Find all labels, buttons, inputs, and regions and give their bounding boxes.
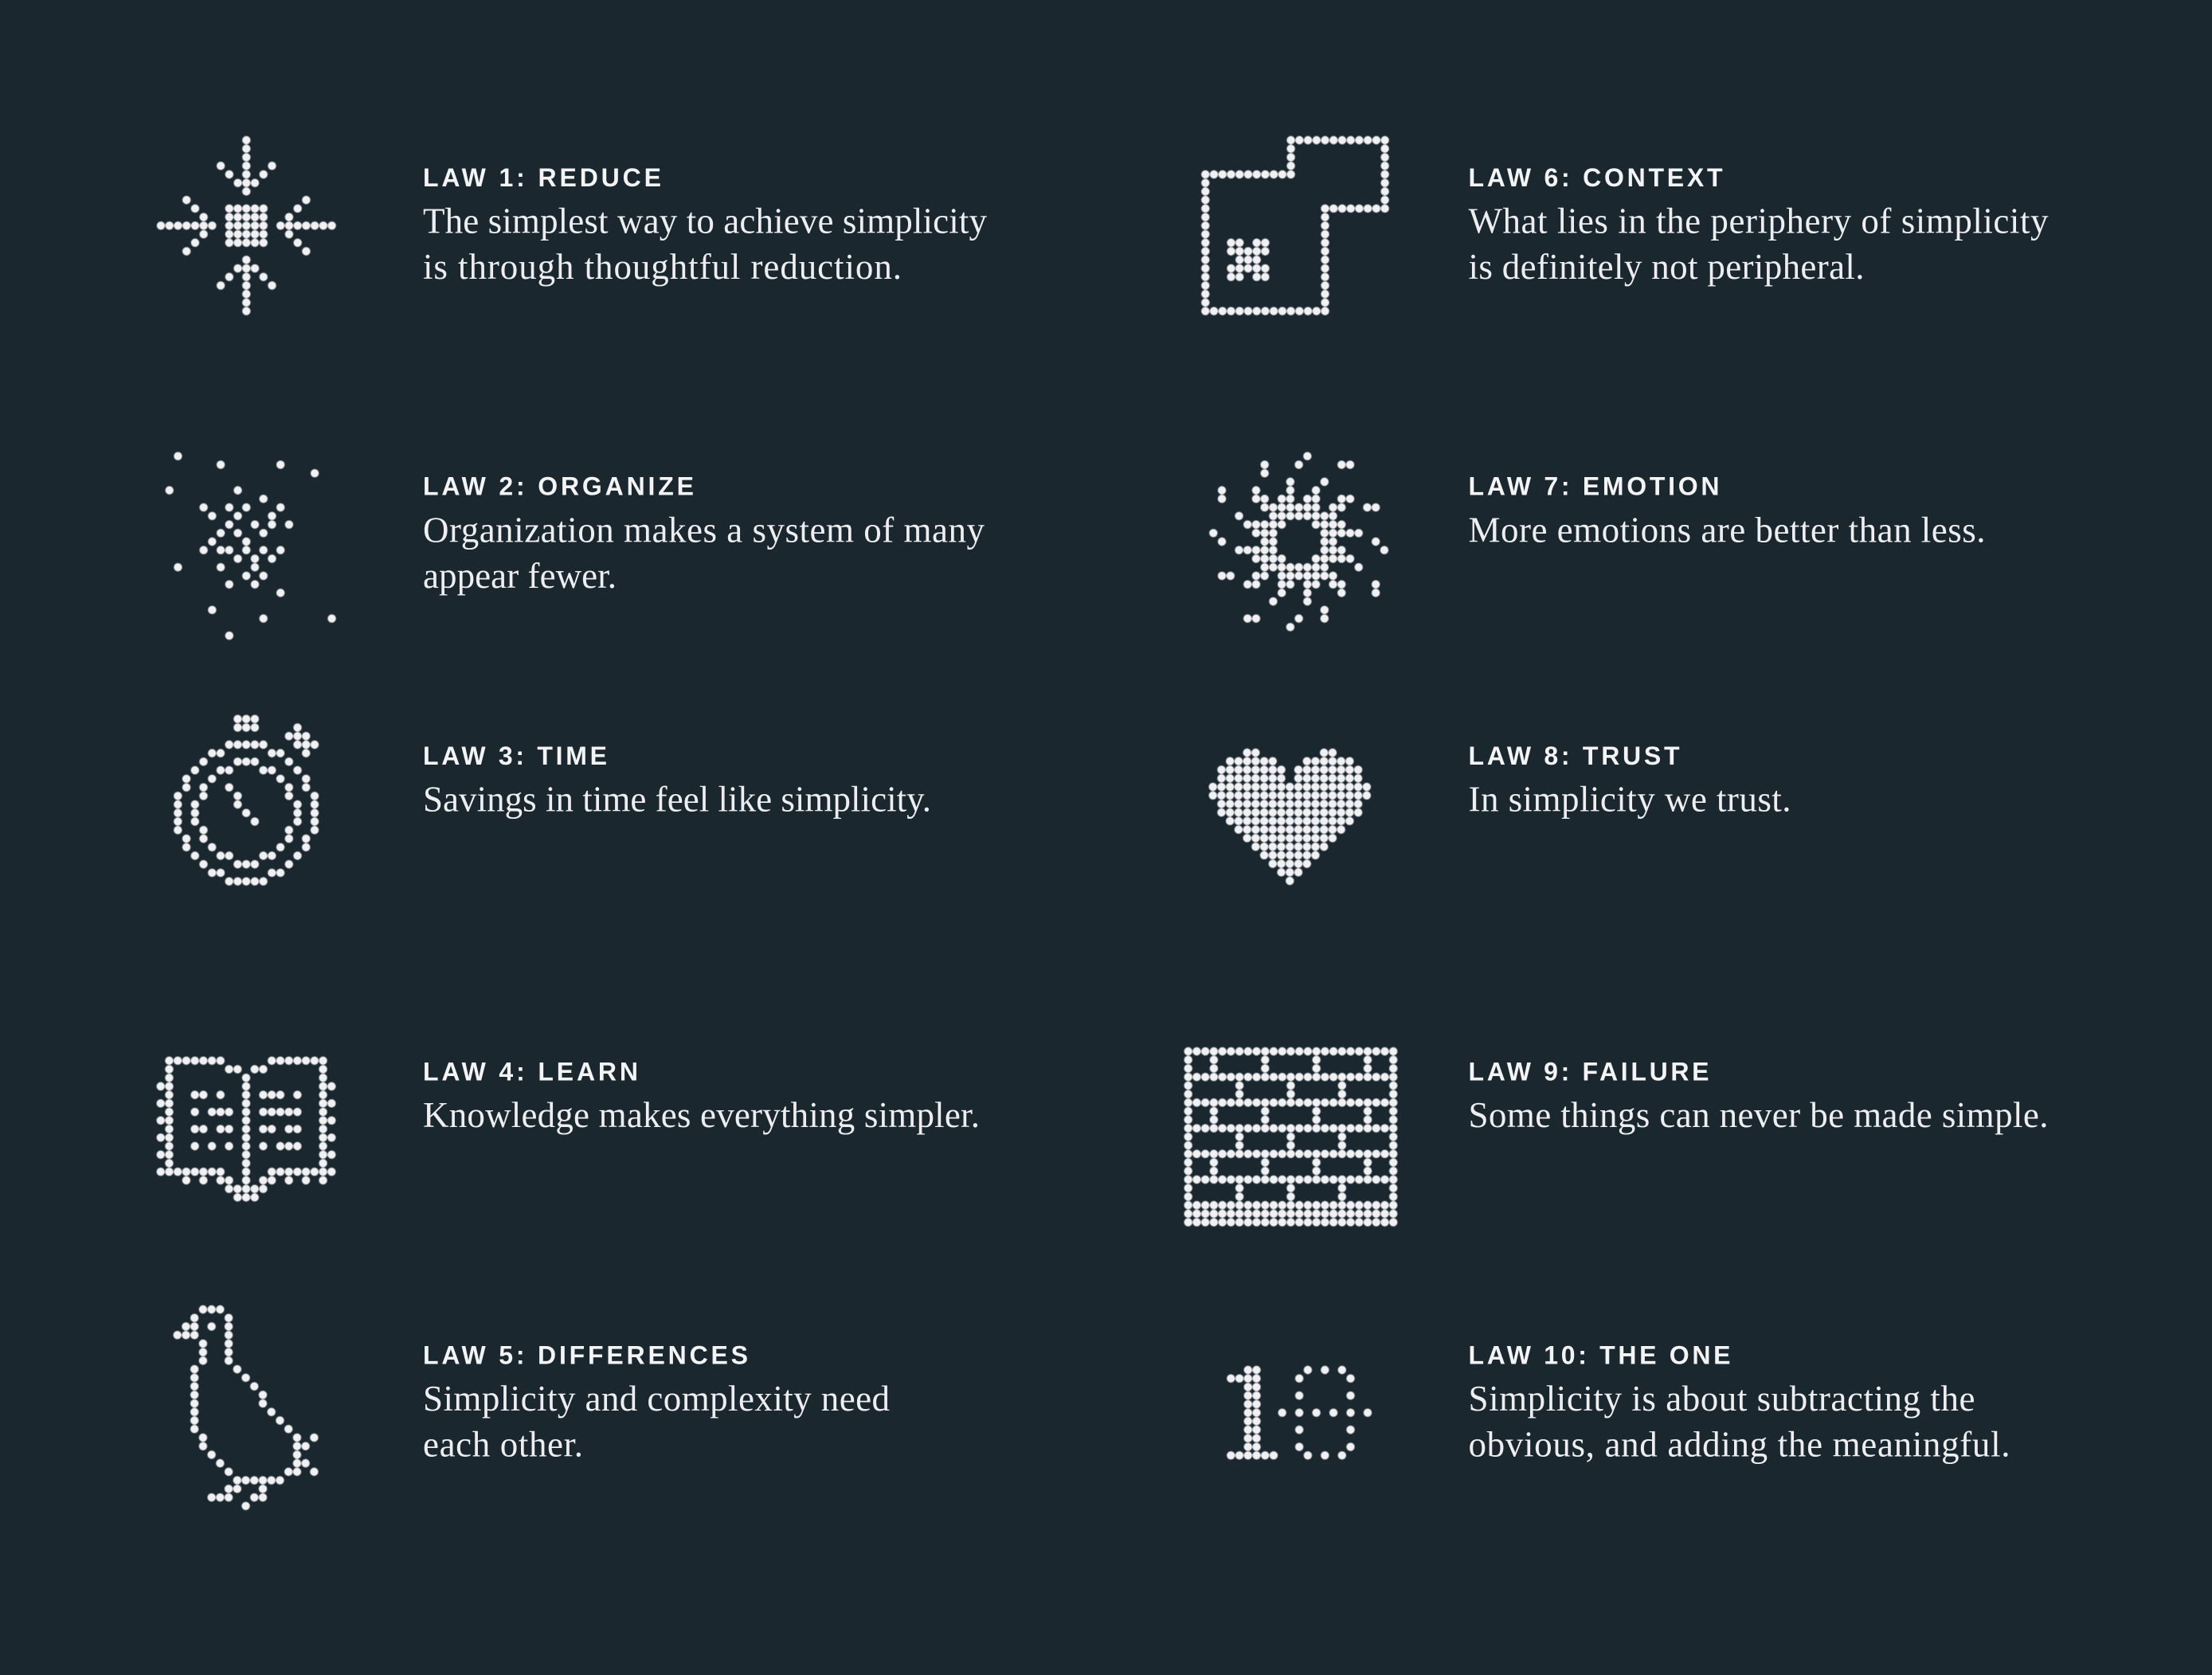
text: law 1 description: The simplest way to achieve simplicity (423, 202, 988, 241)
icon: brick wall (1188, 1051, 1393, 1223)
text: law 10 description: Simplicity is about subtracting the (1469, 1379, 1975, 1419)
heading: law 6: LAW 6: CONTEXT (1469, 163, 1723, 192)
icon: goose (178, 1309, 314, 1506)
panel: law 5 differences (178, 1309, 890, 1506)
text: law 2 description: appear fewer. (423, 556, 617, 596)
text: law 3 description: Savings in time feel like simplicity. (423, 779, 931, 819)
text: law 1 description: is through thoughtful reduction. (423, 247, 902, 287)
icon: open book (161, 1061, 331, 1197)
icon: heart (1213, 753, 1367, 881)
icon: stopwatch (178, 719, 315, 882)
panel: law 3 time (178, 719, 931, 882)
icon: arrows pointing into a square (161, 140, 332, 311)
panel: law 8 trust (1213, 742, 1791, 881)
panel: law 9 failure (1188, 1051, 2049, 1223)
text: law 10 description: obvious, and adding the meaningful. (1469, 1424, 2010, 1464)
panel: law 7 emotion (1213, 456, 1985, 627)
heading: law 2: LAW 2: ORGANIZE (423, 472, 694, 500)
text: law 6 description: What lies in the periphery of simplicity (1469, 202, 2049, 241)
heading: law 5: LAW 5: DIFFERENCES (423, 1341, 748, 1370)
panel: law 4 learn (161, 1058, 980, 1197)
panel: law 2 organize (170, 456, 985, 636)
text: law 6 description: is definitely not peripheral. (1469, 247, 1864, 287)
panel: law 1 reduce (161, 140, 988, 311)
text: law 4 description: Knowledge makes everything simpler. (423, 1095, 980, 1135)
text: law 8 description: In simplicity we trust. (1469, 779, 1791, 819)
icon: outlined shape with a cross (1205, 140, 1385, 311)
text: law 6 description (1469, 202, 2049, 287)
heading: law 10: LAW 10: THE ONE (1469, 1341, 1730, 1370)
heading: law 3: LAW 3: TIME (423, 742, 607, 770)
panel: law 10 the one (1231, 1341, 2010, 1464)
heading: law 4: LAW 4: LEARN (423, 1058, 638, 1086)
text: law 5 description (423, 1379, 890, 1464)
heading: law 9: LAW 9: FAILURE (1469, 1058, 1709, 1086)
text: law 7 description: More emotions are better than less. (1469, 510, 1985, 550)
icon: radiating burst (1213, 456, 1384, 627)
icon: number ten (1231, 1370, 1368, 1455)
heading: law 1: LAW 1: REDUCE (423, 163, 661, 192)
text: law 9 description: Some things can never be made simple. (1469, 1095, 2049, 1135)
text: law 1 description (423, 202, 988, 287)
text: law 5 description: each other. (423, 1424, 583, 1464)
text: law 5 description: Simplicity and complexity need (423, 1379, 890, 1419)
panel: law 6 context (1205, 140, 2049, 311)
heading: law 8: LAW 8: TRUST (1469, 742, 1680, 770)
text: law 2 description: Organization makes a system of many (423, 510, 985, 550)
text: law 10 description (1469, 1379, 2010, 1464)
heading: law 7: LAW 7: EMOTION (1469, 472, 1719, 500)
icon: scattered dots clustering (170, 456, 332, 636)
text: law 2 description (423, 510, 985, 596)
